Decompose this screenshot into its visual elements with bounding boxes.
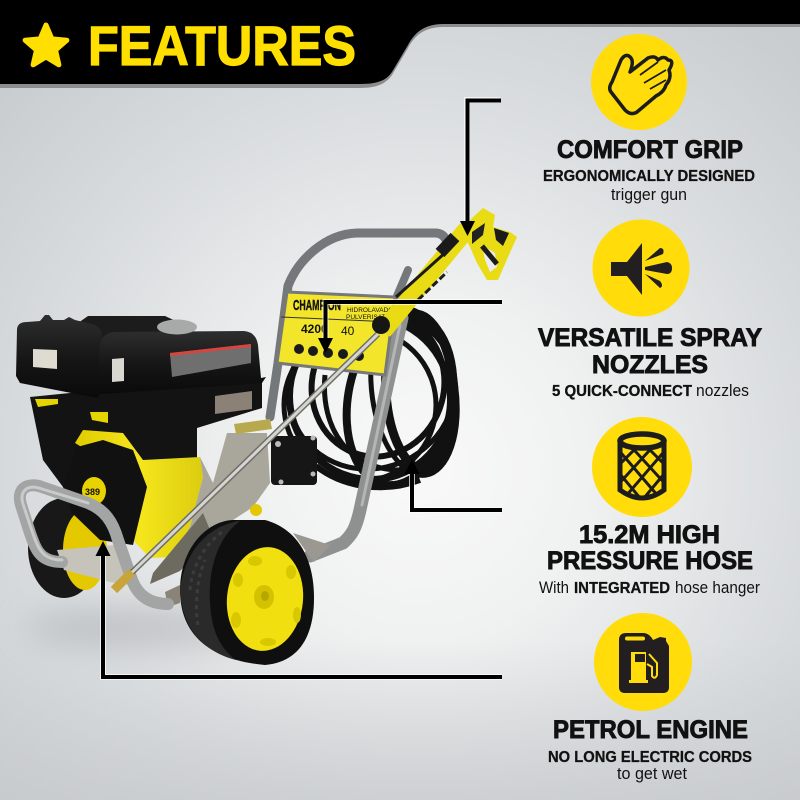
- yellow levers: [35, 399, 108, 423]
- engine body: [30, 382, 262, 487]
- spray gun: [372, 208, 517, 334]
- feature: comfort grip: [543, 34, 755, 204]
- floor shadow: [25, 606, 255, 650]
- arrow: hose: [404, 459, 502, 510]
- rear wheel: [28, 498, 107, 598]
- feature: hose: [539, 417, 760, 597]
- pump body: [172, 433, 270, 570]
- base end plate: [165, 585, 180, 607]
- pressure washer: [16, 208, 517, 665]
- detail end: hose hanger: [675, 579, 760, 597]
- hose reel: [260, 284, 481, 509]
- arrow: engine: [96, 541, 502, 677]
- feature: spray nozzles: [538, 220, 762, 400]
- icon: hand: [591, 34, 687, 130]
- arrow: comfort grip: [460, 100, 501, 236]
- heading: VERSATILE SPRAY: [538, 324, 762, 352]
- left tank: [16, 315, 102, 398]
- pump brass fittings: [234, 419, 272, 434]
- heading: COMFORT GRIP: [557, 136, 743, 164]
- heading: PETROL ENGINE: [553, 716, 748, 744]
- header banner: [0, 0, 800, 88]
- pump manifold: [271, 436, 317, 485]
- detail: nozzles: [696, 382, 749, 400]
- detail: to get wet: [617, 765, 687, 783]
- control panel: HIDROLAVADORA: [347, 307, 403, 314]
- title: FEATURES: [88, 14, 356, 77]
- fuel cap: [157, 320, 197, 334]
- gun handle: [462, 208, 517, 280]
- recoil starter: [63, 440, 147, 545]
- control panel: CHAMPION: [293, 297, 341, 314]
- base plate: [57, 545, 130, 585]
- arrow: spray nozzles: [318, 302, 502, 353]
- icon: star: [25, 25, 67, 65]
- control panel: PULVERISATEUR: [346, 314, 400, 321]
- icon: fuel can: [594, 613, 692, 711]
- fuel tank main: [96, 331, 266, 394]
- heading line two: PRESSURE HOSE: [547, 547, 753, 575]
- engine cover top: [78, 316, 180, 340]
- lance: [114, 334, 378, 590]
- feature: petrol engine: [548, 613, 752, 783]
- heading line two: NOZZLES: [592, 351, 708, 379]
- front wheel: [180, 520, 314, 665]
- pressure washer: 389: [85, 487, 100, 497]
- wheel hub: [222, 543, 308, 655]
- detail: trigger gun: [611, 186, 687, 204]
- control panel: 4200: [301, 322, 328, 336]
- heading: 15.2M HIGH: [579, 521, 720, 549]
- icon: hose coil: [592, 417, 692, 517]
- left tank label: [33, 349, 57, 369]
- detail start: With: [539, 579, 569, 597]
- rear base: [293, 533, 340, 562]
- pump bracket: [150, 513, 213, 584]
- control panel: 40: [341, 324, 355, 338]
- yellow engine shroud: [75, 430, 203, 558]
- control panel: [277, 292, 403, 375]
- small labels: [112, 358, 124, 382]
- subheading: ERGONOMICALLY DESIGNED: [543, 168, 755, 185]
- warning label: [170, 344, 251, 377]
- subheading: NO LONG ELECTRIC CORDS: [548, 749, 752, 766]
- icon: spray: [592, 220, 690, 316]
- subheading: INTEGRATED: [574, 580, 670, 597]
- yellow cap: [250, 504, 262, 516]
- front bumper tube: [20, 485, 168, 604]
- subheading: 5 QUICK-CONNECT: [552, 383, 692, 400]
- frame: rear tubes: [270, 233, 446, 556]
